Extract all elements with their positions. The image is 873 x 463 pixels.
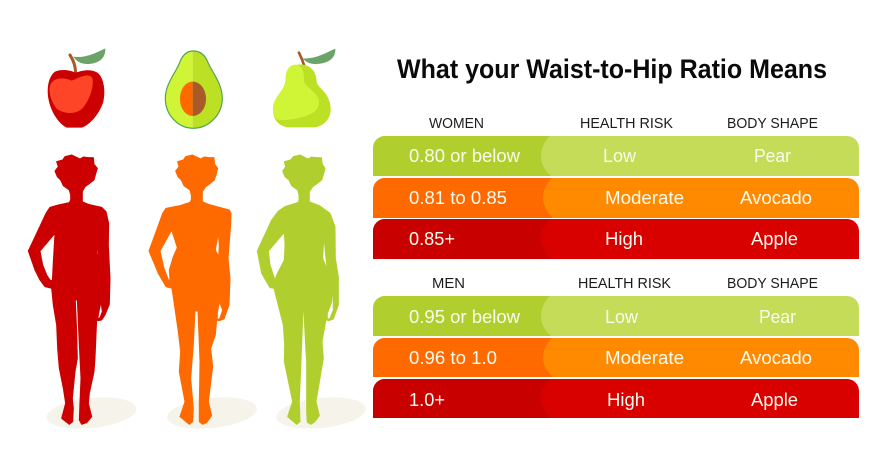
women column headers <box>429 116 818 132</box>
men row: high risk: Apple <box>751 390 798 410</box>
men row: high risk: 1.0+ <box>409 390 445 410</box>
men row: low risk: Low <box>605 307 639 327</box>
women row: high risk <box>373 219 859 259</box>
men column headers: BODY SHAPE <box>727 276 818 292</box>
title: What your Waist-to-Hip Ratio Means <box>397 54 827 84</box>
women row: high risk: Apple <box>751 229 798 249</box>
women row: moderate risk <box>373 178 859 218</box>
women row: high risk: High <box>605 229 643 249</box>
women row: high risk: 0.85+ <box>409 229 455 249</box>
men row: low risk: 0.95 or below <box>409 307 521 327</box>
women row: moderate risk: Moderate <box>605 188 684 208</box>
women row: low risk: 0.80 or below <box>409 146 521 166</box>
men column headers: MEN <box>432 276 465 292</box>
women row: low risk: Low <box>603 146 637 166</box>
figure: pear body shape <box>257 155 338 424</box>
women column headers: HEALTH RISK <box>580 116 673 132</box>
women column headers: WOMEN <box>429 116 484 132</box>
men row: moderate risk: Avocado <box>740 348 812 368</box>
men row: low risk <box>373 296 859 336</box>
men row: moderate risk: Moderate <box>605 348 684 368</box>
women row: moderate risk: Avocado <box>740 188 812 208</box>
women row: moderate risk: 0.81 to 0.85 <box>409 188 507 208</box>
men table <box>373 276 859 418</box>
shadow: pear figure <box>275 393 367 433</box>
men row: low risk: Pear <box>759 307 796 327</box>
men column headers: HEALTH RISK <box>578 276 671 292</box>
women row: low risk: Pear <box>754 146 791 166</box>
women table <box>373 116 859 259</box>
women column headers: BODY SHAPE <box>727 116 818 132</box>
men row: moderate risk: 0.96 to 1.0 <box>409 348 497 368</box>
men row: moderate risk <box>373 338 859 377</box>
icon: apple <box>48 48 105 128</box>
shadow: avocado figure <box>166 393 258 433</box>
men row: high risk: High <box>607 390 645 410</box>
figure: avocado body shape <box>149 155 231 424</box>
shadow: apple figure <box>45 393 138 433</box>
icon: avocado <box>163 50 224 130</box>
figure: apple body shape <box>28 155 110 424</box>
men column headers <box>432 276 818 292</box>
men row: high risk <box>373 379 859 418</box>
women row: low risk <box>373 136 859 176</box>
icon: pear <box>273 49 335 127</box>
